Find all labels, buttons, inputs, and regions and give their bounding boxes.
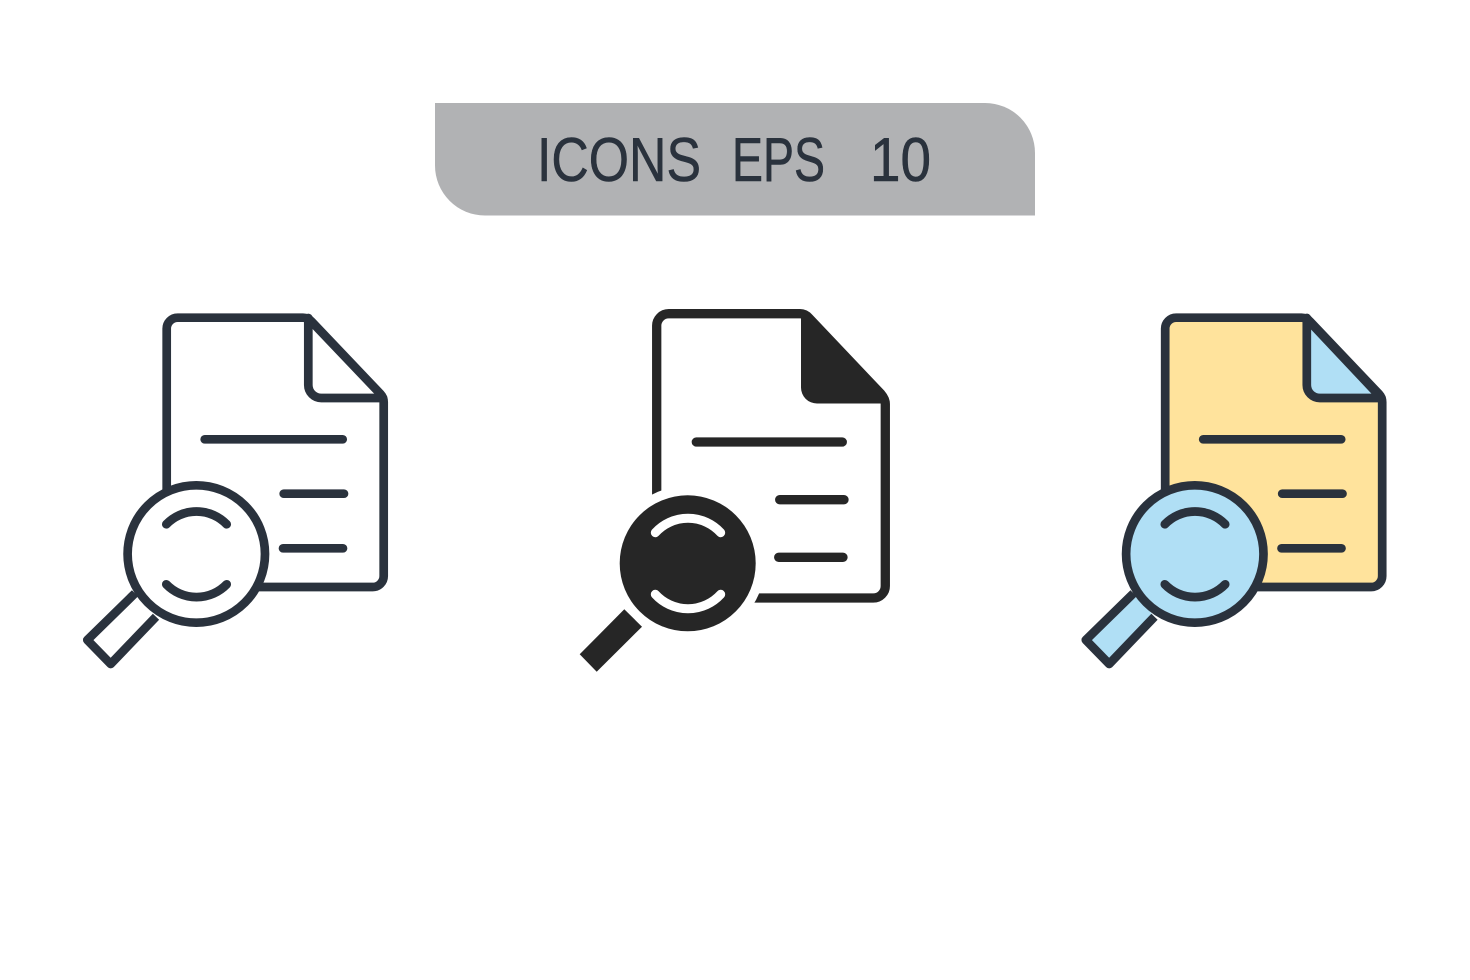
heading: ICONS EPS 10: EPS [732, 126, 825, 195]
yellow document sheet [1165, 318, 1382, 587]
lens highlights [166, 511, 227, 597]
magnifier lens [128, 485, 265, 623]
solid magnifier handle [580, 609, 642, 672]
magnifier handle [87, 593, 156, 664]
heading: ICONS EPS 10: 10 [870, 126, 931, 195]
text lines [696, 442, 844, 557]
text lines [205, 439, 344, 548]
folded corner [308, 318, 383, 398]
document sheet [657, 314, 885, 598]
icon: coloured document with magnifier [1086, 318, 1382, 664]
document sheet [167, 318, 384, 587]
lens highlights [1165, 511, 1225, 597]
icon: solid document with magnifier [580, 312, 889, 672]
solid folded corner [801, 312, 889, 404]
text lines [1203, 439, 1342, 548]
icon: outline document with magnifier [87, 318, 384, 664]
lens highlights [655, 518, 721, 609]
blue folded corner [1307, 318, 1382, 398]
blue magnifier lens [1126, 485, 1264, 623]
blue magnifier handle [1086, 593, 1154, 664]
title banner [435, 103, 1035, 216]
gap ring around lens [610, 486, 765, 641]
heading: ICONS EPS 10: ICONS [537, 126, 701, 195]
solid magnifier lens [620, 495, 756, 631]
